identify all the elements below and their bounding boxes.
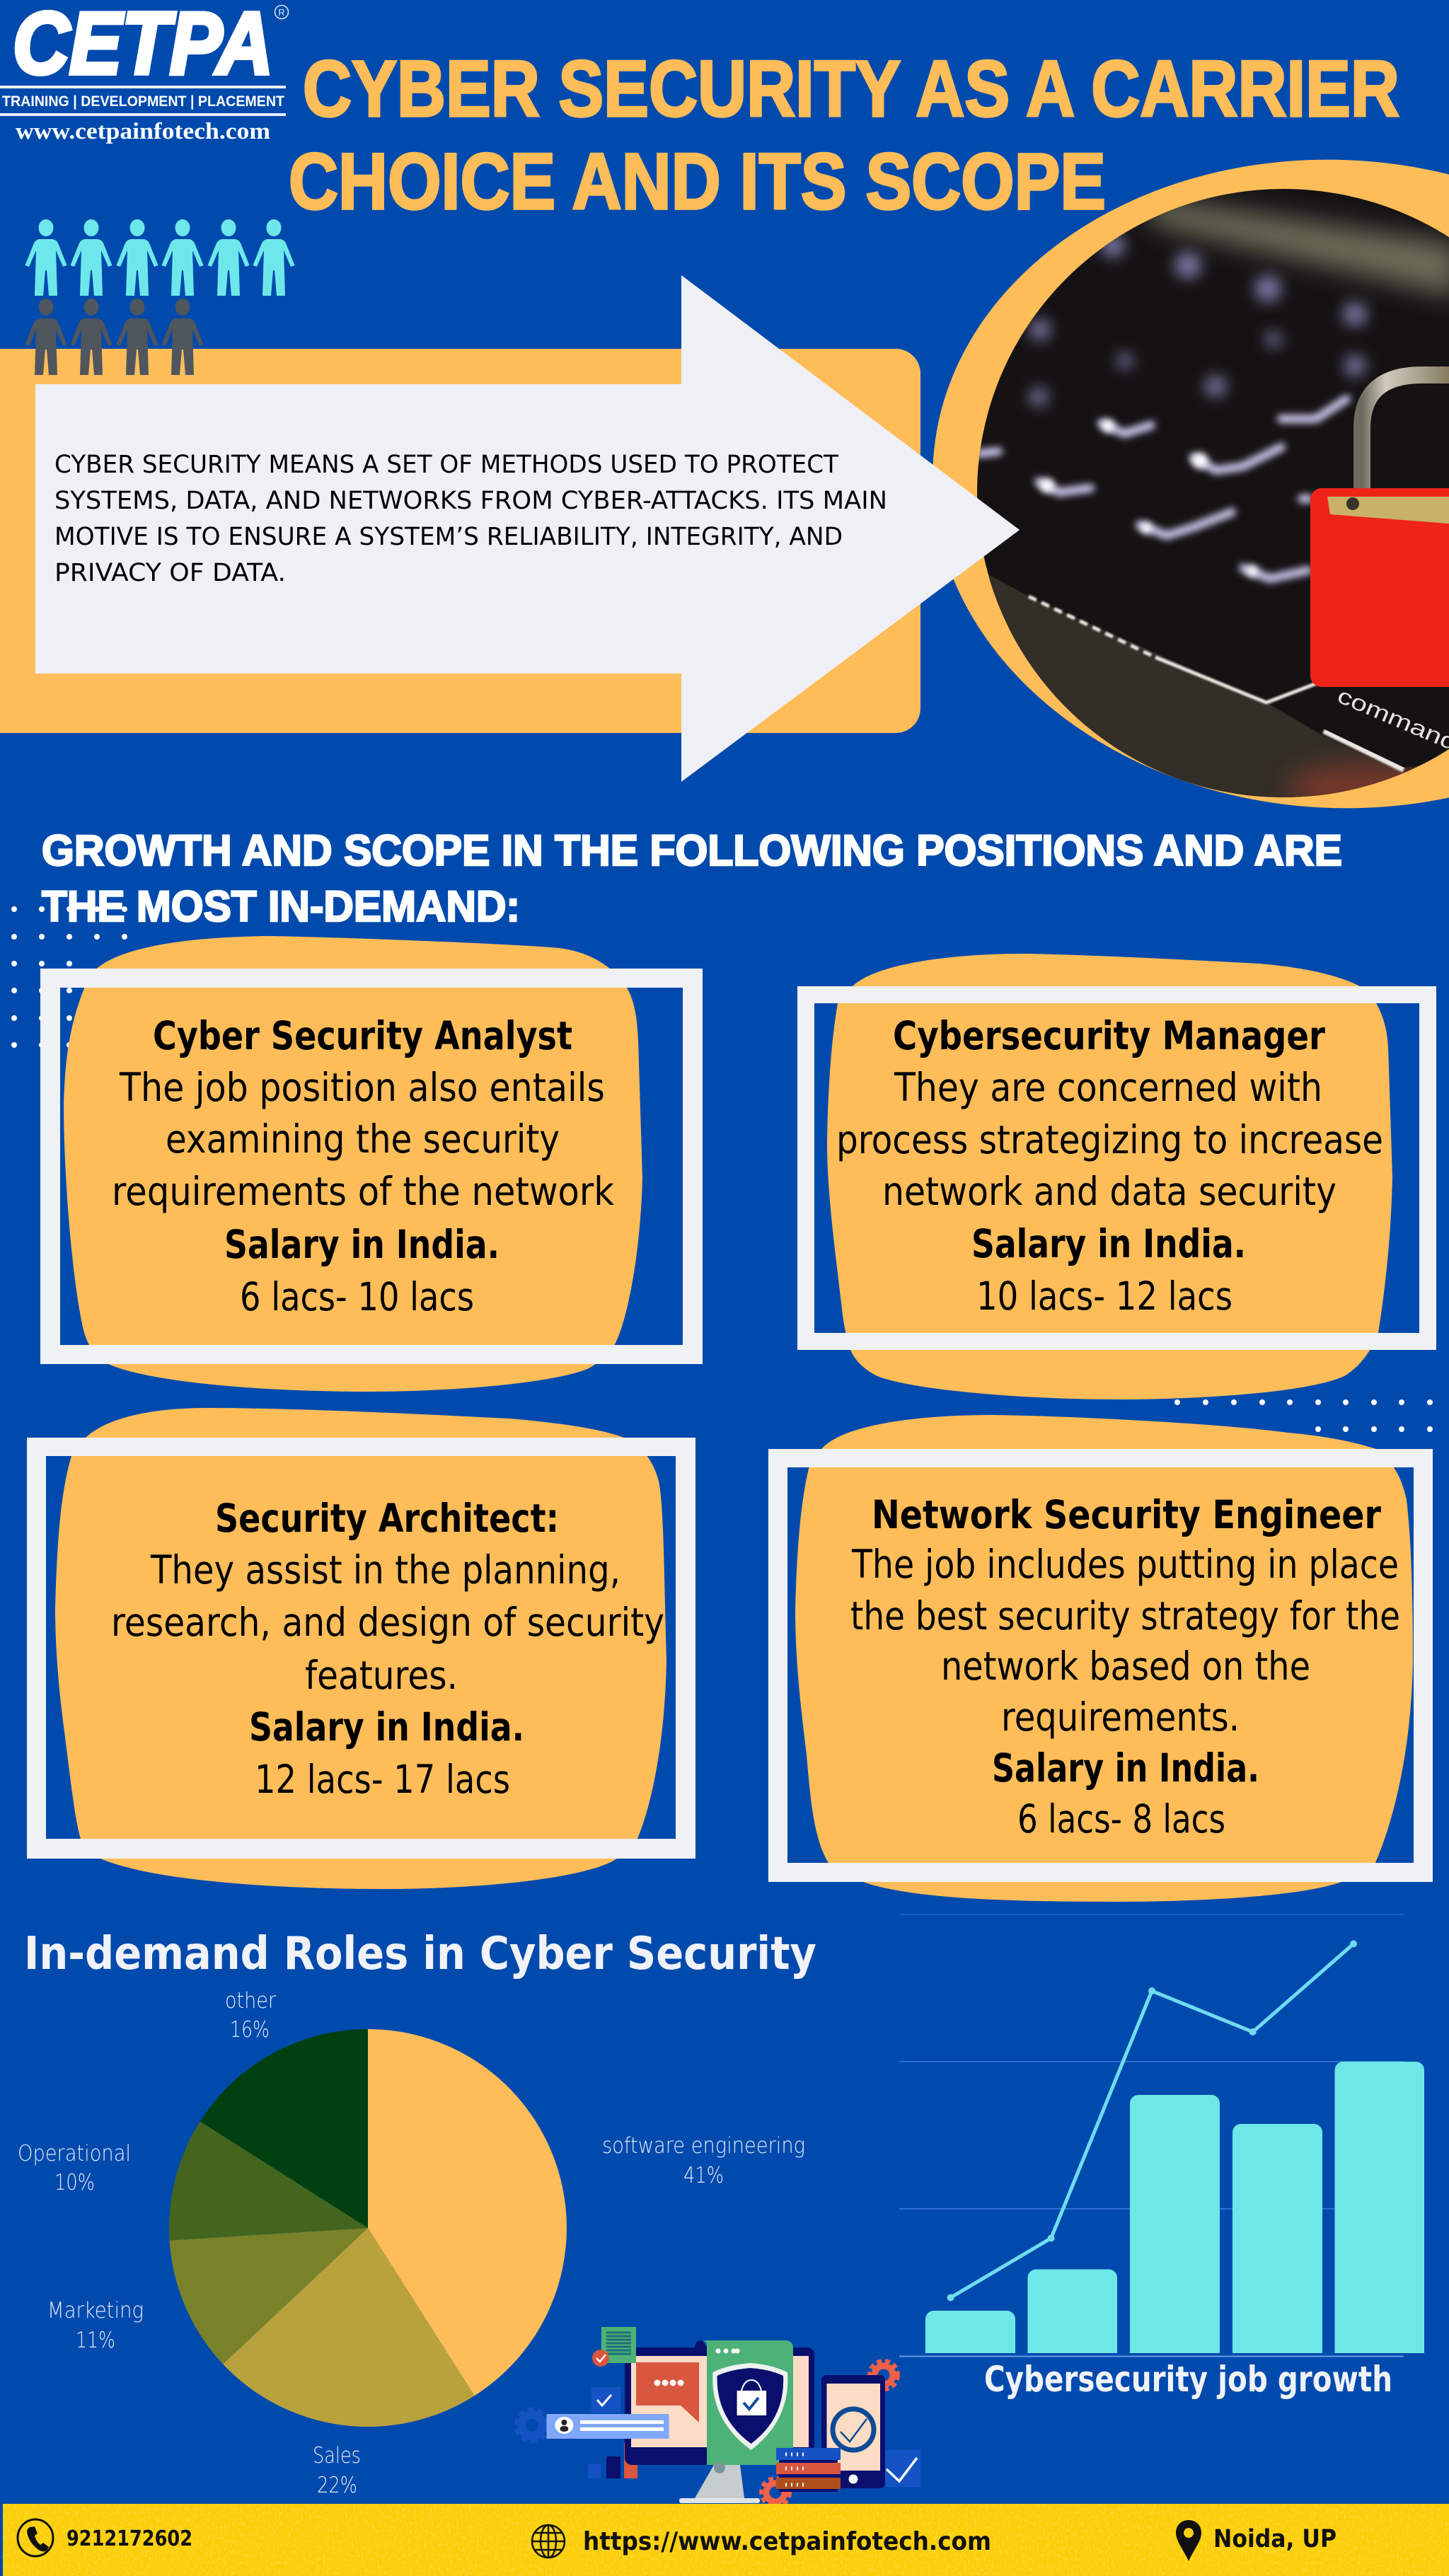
logo tagline: TRAINING | DEVELOPMENT | PLACEMENT xyxy=(2,93,284,110)
arrow shape xyxy=(35,275,1020,782)
pie labels: Marketing xyxy=(47,2298,144,2323)
frame xyxy=(27,1438,695,1859)
pie labels: Sales xyxy=(313,2443,361,2468)
definition text: PRIVACY OF DATA. xyxy=(54,559,286,587)
pie labels: Operational xyxy=(18,2141,131,2166)
card text: Security Architect: xyxy=(215,1496,559,1541)
pie labels: 41% xyxy=(683,2163,724,2188)
frame xyxy=(797,986,1436,1350)
phone xyxy=(821,2375,885,2488)
card text: 6 lacs- 8 lacs xyxy=(1017,1796,1225,1842)
section heading: THE MOST IN-DEMAND: xyxy=(42,882,520,930)
card text: 6 lacs- 10 lacs xyxy=(240,1274,474,1319)
dot pattern right xyxy=(1174,1399,1433,1432)
card text xyxy=(112,1013,614,1319)
blob xyxy=(827,954,1392,1399)
panel: Cyber Security Analyst xyxy=(40,936,703,1392)
card text: The job position also entails xyxy=(119,1065,605,1110)
command label: command xyxy=(1334,683,1449,756)
pie labels: 10% xyxy=(54,2170,95,2195)
gear orange top xyxy=(870,2361,898,2389)
logo rules xyxy=(0,86,286,116)
blob xyxy=(64,936,642,1392)
bright key edges xyxy=(979,399,1346,579)
key outline light xyxy=(1029,596,1404,770)
definition text: SYSTEMS, DATA, AND NETWORKS FROM CYBER-ATTACKS. ITS MAIN xyxy=(54,487,887,515)
definition text xyxy=(54,451,887,587)
job growth chart xyxy=(899,1914,1424,2400)
padlock xyxy=(1310,375,1449,687)
pie labels: software engineering xyxy=(602,2133,805,2159)
card text: Cybersecurity Manager xyxy=(893,1013,1325,1058)
slice: software engineering 41% xyxy=(368,2029,567,2396)
orange panel xyxy=(0,349,920,733)
pie labels: other xyxy=(225,1988,276,2014)
photo: padlock on keyboard xyxy=(969,184,1449,814)
section heading: GROWTH AND SCOPE IN THE FOLLOWING POSITIONS AND ARE xyxy=(42,826,1342,874)
slice: marketing 11% xyxy=(170,2228,368,2364)
red check badge xyxy=(592,2350,609,2367)
orange ellipse behind photo xyxy=(916,139,1449,828)
footer bar xyxy=(3,2504,1449,2576)
card text: network based on the xyxy=(941,1644,1310,1689)
card text: features. xyxy=(305,1653,458,1698)
illustration: security devices xyxy=(516,2327,920,2507)
arrow with definition xyxy=(35,275,1020,782)
slice: other 16% xyxy=(200,2029,368,2228)
location text: Noida, UP xyxy=(1213,2525,1337,2553)
card text: Salary in India. xyxy=(971,1221,1246,1266)
slice: operational 10% xyxy=(169,2121,368,2241)
card text: requirements. xyxy=(1001,1694,1240,1740)
pie labels: 16% xyxy=(230,2017,270,2043)
frame xyxy=(40,969,703,1364)
panel: Cybersecurity Manager xyxy=(797,954,1436,1399)
card text: network and data security xyxy=(882,1169,1337,1214)
desk surface xyxy=(988,574,1402,797)
trend line xyxy=(947,1940,1357,2301)
card text: Salary in India. xyxy=(992,1745,1259,1791)
blue bag right xyxy=(885,2450,920,2487)
grey people xyxy=(25,299,204,375)
card text xyxy=(836,1013,1383,1319)
card text: 12 lacs- 17 lacs xyxy=(255,1757,510,1802)
card text: They are concerned with xyxy=(894,1065,1322,1110)
command key xyxy=(1323,727,1449,768)
bars xyxy=(925,2062,1424,2353)
blob xyxy=(55,1408,666,1889)
icon: phone xyxy=(18,2519,53,2556)
card text: 10 lacs- 12 lacs xyxy=(976,1273,1232,1319)
gear blue xyxy=(516,2410,548,2441)
grid lines xyxy=(899,1914,1404,2356)
card text: Cyber Security Analyst xyxy=(153,1013,572,1058)
card text: requirements of the network xyxy=(112,1169,614,1214)
CETPA logo xyxy=(0,0,289,144)
card text: Salary in India. xyxy=(224,1222,500,1267)
pie labels: 11% xyxy=(76,2328,115,2353)
footer texture xyxy=(3,2504,1449,2576)
panel: Security Architect xyxy=(27,1408,695,1889)
website url: https://www.cetpainfotech.com xyxy=(583,2527,991,2556)
section heading xyxy=(42,826,1342,930)
registered mark xyxy=(275,6,289,18)
pie labels: 22% xyxy=(317,2473,357,2498)
logo website: www.cetpainfotech.com xyxy=(16,119,270,144)
title xyxy=(289,45,1399,226)
gear orange bottom xyxy=(761,2478,790,2507)
card text: examining the security xyxy=(166,1116,560,1162)
heading: in-demand roles: In-demand Roles in Cyber Security xyxy=(24,1928,816,1980)
key highlights xyxy=(1040,420,1258,577)
definition text: CYBER SECURITY MEANS A SET OF METHODS USED TO PROTECT xyxy=(54,451,839,479)
pie chart xyxy=(18,1988,805,2498)
frame xyxy=(768,1449,1433,1882)
panel: Network Security Engineer xyxy=(768,1415,1433,1902)
people icon array xyxy=(25,219,294,375)
green panel with shield xyxy=(695,2340,793,2473)
blob xyxy=(795,1415,1413,1902)
definition text: MOTIVE IS TO ENSURE A SYSTEM’S RELIABILITY, INTEGRITY, AND xyxy=(54,523,843,551)
card text: process strategizing to increase xyxy=(836,1117,1383,1162)
icon: globe xyxy=(532,2525,565,2558)
card text xyxy=(111,1496,664,1802)
pie labels xyxy=(18,1988,805,2498)
phone number: 9212172602 xyxy=(67,2526,192,2551)
registered mark: R xyxy=(278,7,285,18)
dot pattern left xyxy=(11,906,127,1048)
card text: They assist in the planning, xyxy=(150,1547,620,1593)
slice: sales 22% xyxy=(223,2228,475,2427)
icon: location pin xyxy=(1176,2520,1201,2561)
card text: research, and design of security xyxy=(111,1600,664,1645)
monitor xyxy=(625,2347,814,2503)
green document xyxy=(601,2327,636,2363)
card text: Network Security Engineer xyxy=(872,1492,1381,1537)
user bar xyxy=(546,2414,669,2439)
server stack xyxy=(776,2448,841,2492)
card text: Salary in India. xyxy=(249,1704,524,1750)
card text xyxy=(850,1492,1400,1842)
blurred top band xyxy=(1132,195,1449,297)
small bar chart xyxy=(588,2443,637,2478)
speech bubble xyxy=(636,2362,699,2422)
cyan people xyxy=(25,219,294,296)
soft key lights xyxy=(1029,233,1367,406)
blue bag left xyxy=(591,2387,620,2413)
title: CHOICE AND ITS SCOPE xyxy=(289,137,1106,226)
